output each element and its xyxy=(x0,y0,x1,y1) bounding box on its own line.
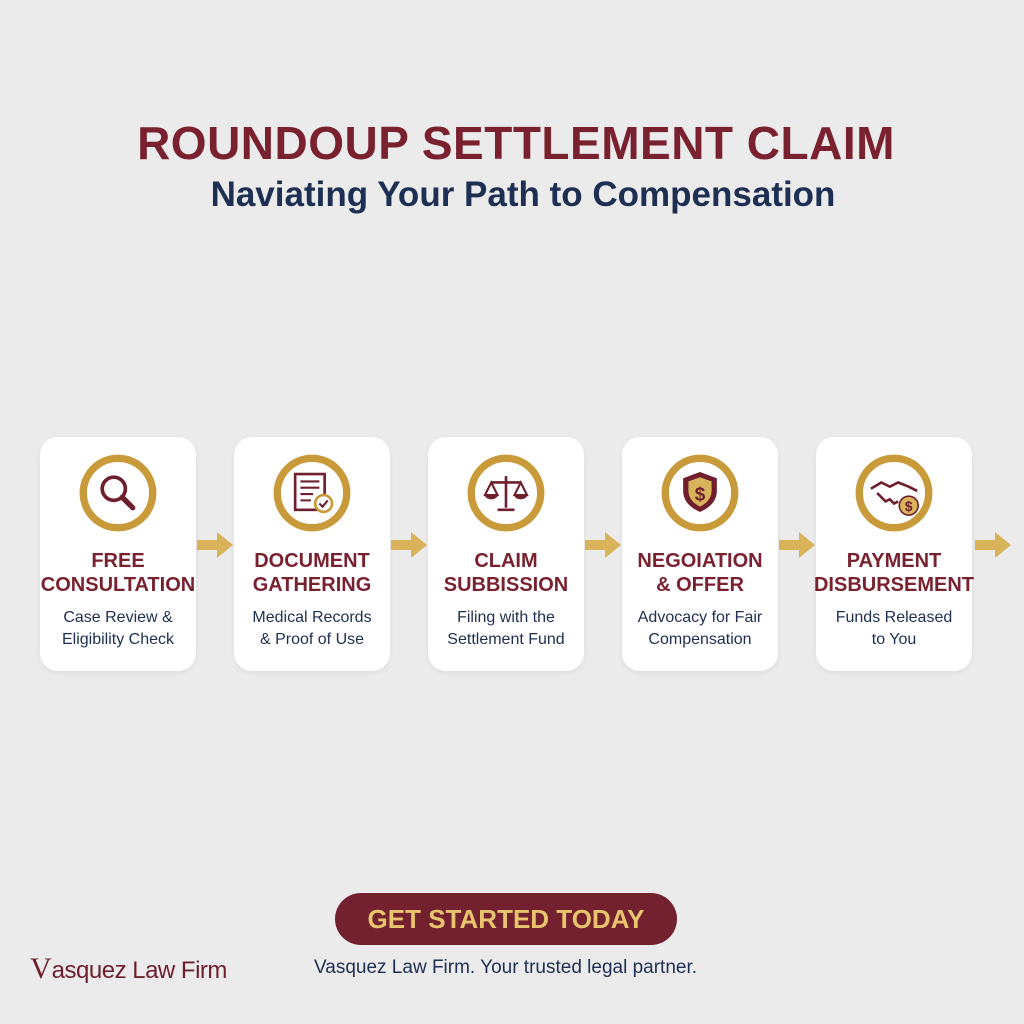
heading: DISBURSEMENT xyxy=(814,574,974,596)
description xyxy=(638,609,762,648)
heading: CLAIM xyxy=(474,550,538,572)
description: Funds Released xyxy=(836,609,952,626)
subtitle: Naviating Your Path to Compensation xyxy=(211,175,835,214)
description xyxy=(62,609,174,648)
arrow 5 xyxy=(975,532,1011,558)
card 1: free consultation xyxy=(40,437,196,671)
arrow 3 xyxy=(585,532,621,558)
card 4: negotiation xyxy=(622,437,778,671)
heading: PAYMENT xyxy=(847,550,941,572)
heading: NEGOIATION xyxy=(637,550,763,572)
heading xyxy=(637,550,763,596)
description: Medical Records xyxy=(252,609,372,626)
card 3: claim submission xyxy=(428,437,584,671)
arrow 1 xyxy=(197,532,233,558)
card 5: payment xyxy=(816,437,972,671)
description: Eligibility Check xyxy=(62,631,174,648)
title: ROUNDOUP SETTLEMENT CLAIM xyxy=(137,117,895,169)
card 2: document gathering xyxy=(234,437,390,671)
description xyxy=(252,609,372,648)
arrow 4 xyxy=(779,532,815,558)
heading: SUBBISSION xyxy=(444,574,568,596)
heading: FREE xyxy=(91,550,145,572)
heading xyxy=(814,550,974,596)
icon: handshake coin xyxy=(856,454,932,532)
CTA button: GET STARTED TODAY xyxy=(368,904,644,934)
tagline: Vasquez Law Firm. Your trusted legal partner. xyxy=(314,957,697,978)
description: Compensation xyxy=(648,631,752,648)
description: to You xyxy=(872,631,916,648)
icon: shield dollar xyxy=(662,454,738,532)
icon: document xyxy=(274,454,350,532)
logo: Vasquez Law Firm xyxy=(30,952,227,985)
description: Filing with the xyxy=(457,609,555,626)
icon: handshake coin: $ xyxy=(905,499,913,514)
description: Advocacy for Fair xyxy=(638,609,762,626)
CTA button xyxy=(335,893,677,945)
heading xyxy=(41,550,195,596)
arrow 2 xyxy=(391,532,427,558)
description: Settlement Fund xyxy=(447,631,565,648)
description: & Proof of Use xyxy=(260,631,364,648)
heading: GATHERING xyxy=(253,574,371,596)
icon: magnifier xyxy=(80,454,156,532)
description xyxy=(836,609,952,648)
heading: & OFFER xyxy=(656,574,744,596)
description: Case Review & xyxy=(63,609,173,626)
heading: CONSULTATION xyxy=(41,574,195,596)
heading xyxy=(444,550,568,596)
heading: DOCUMENT xyxy=(254,550,370,572)
icon: shield dollar: $ xyxy=(695,484,706,505)
icon: scales xyxy=(468,454,544,532)
heading xyxy=(253,550,371,596)
description xyxy=(447,609,565,648)
